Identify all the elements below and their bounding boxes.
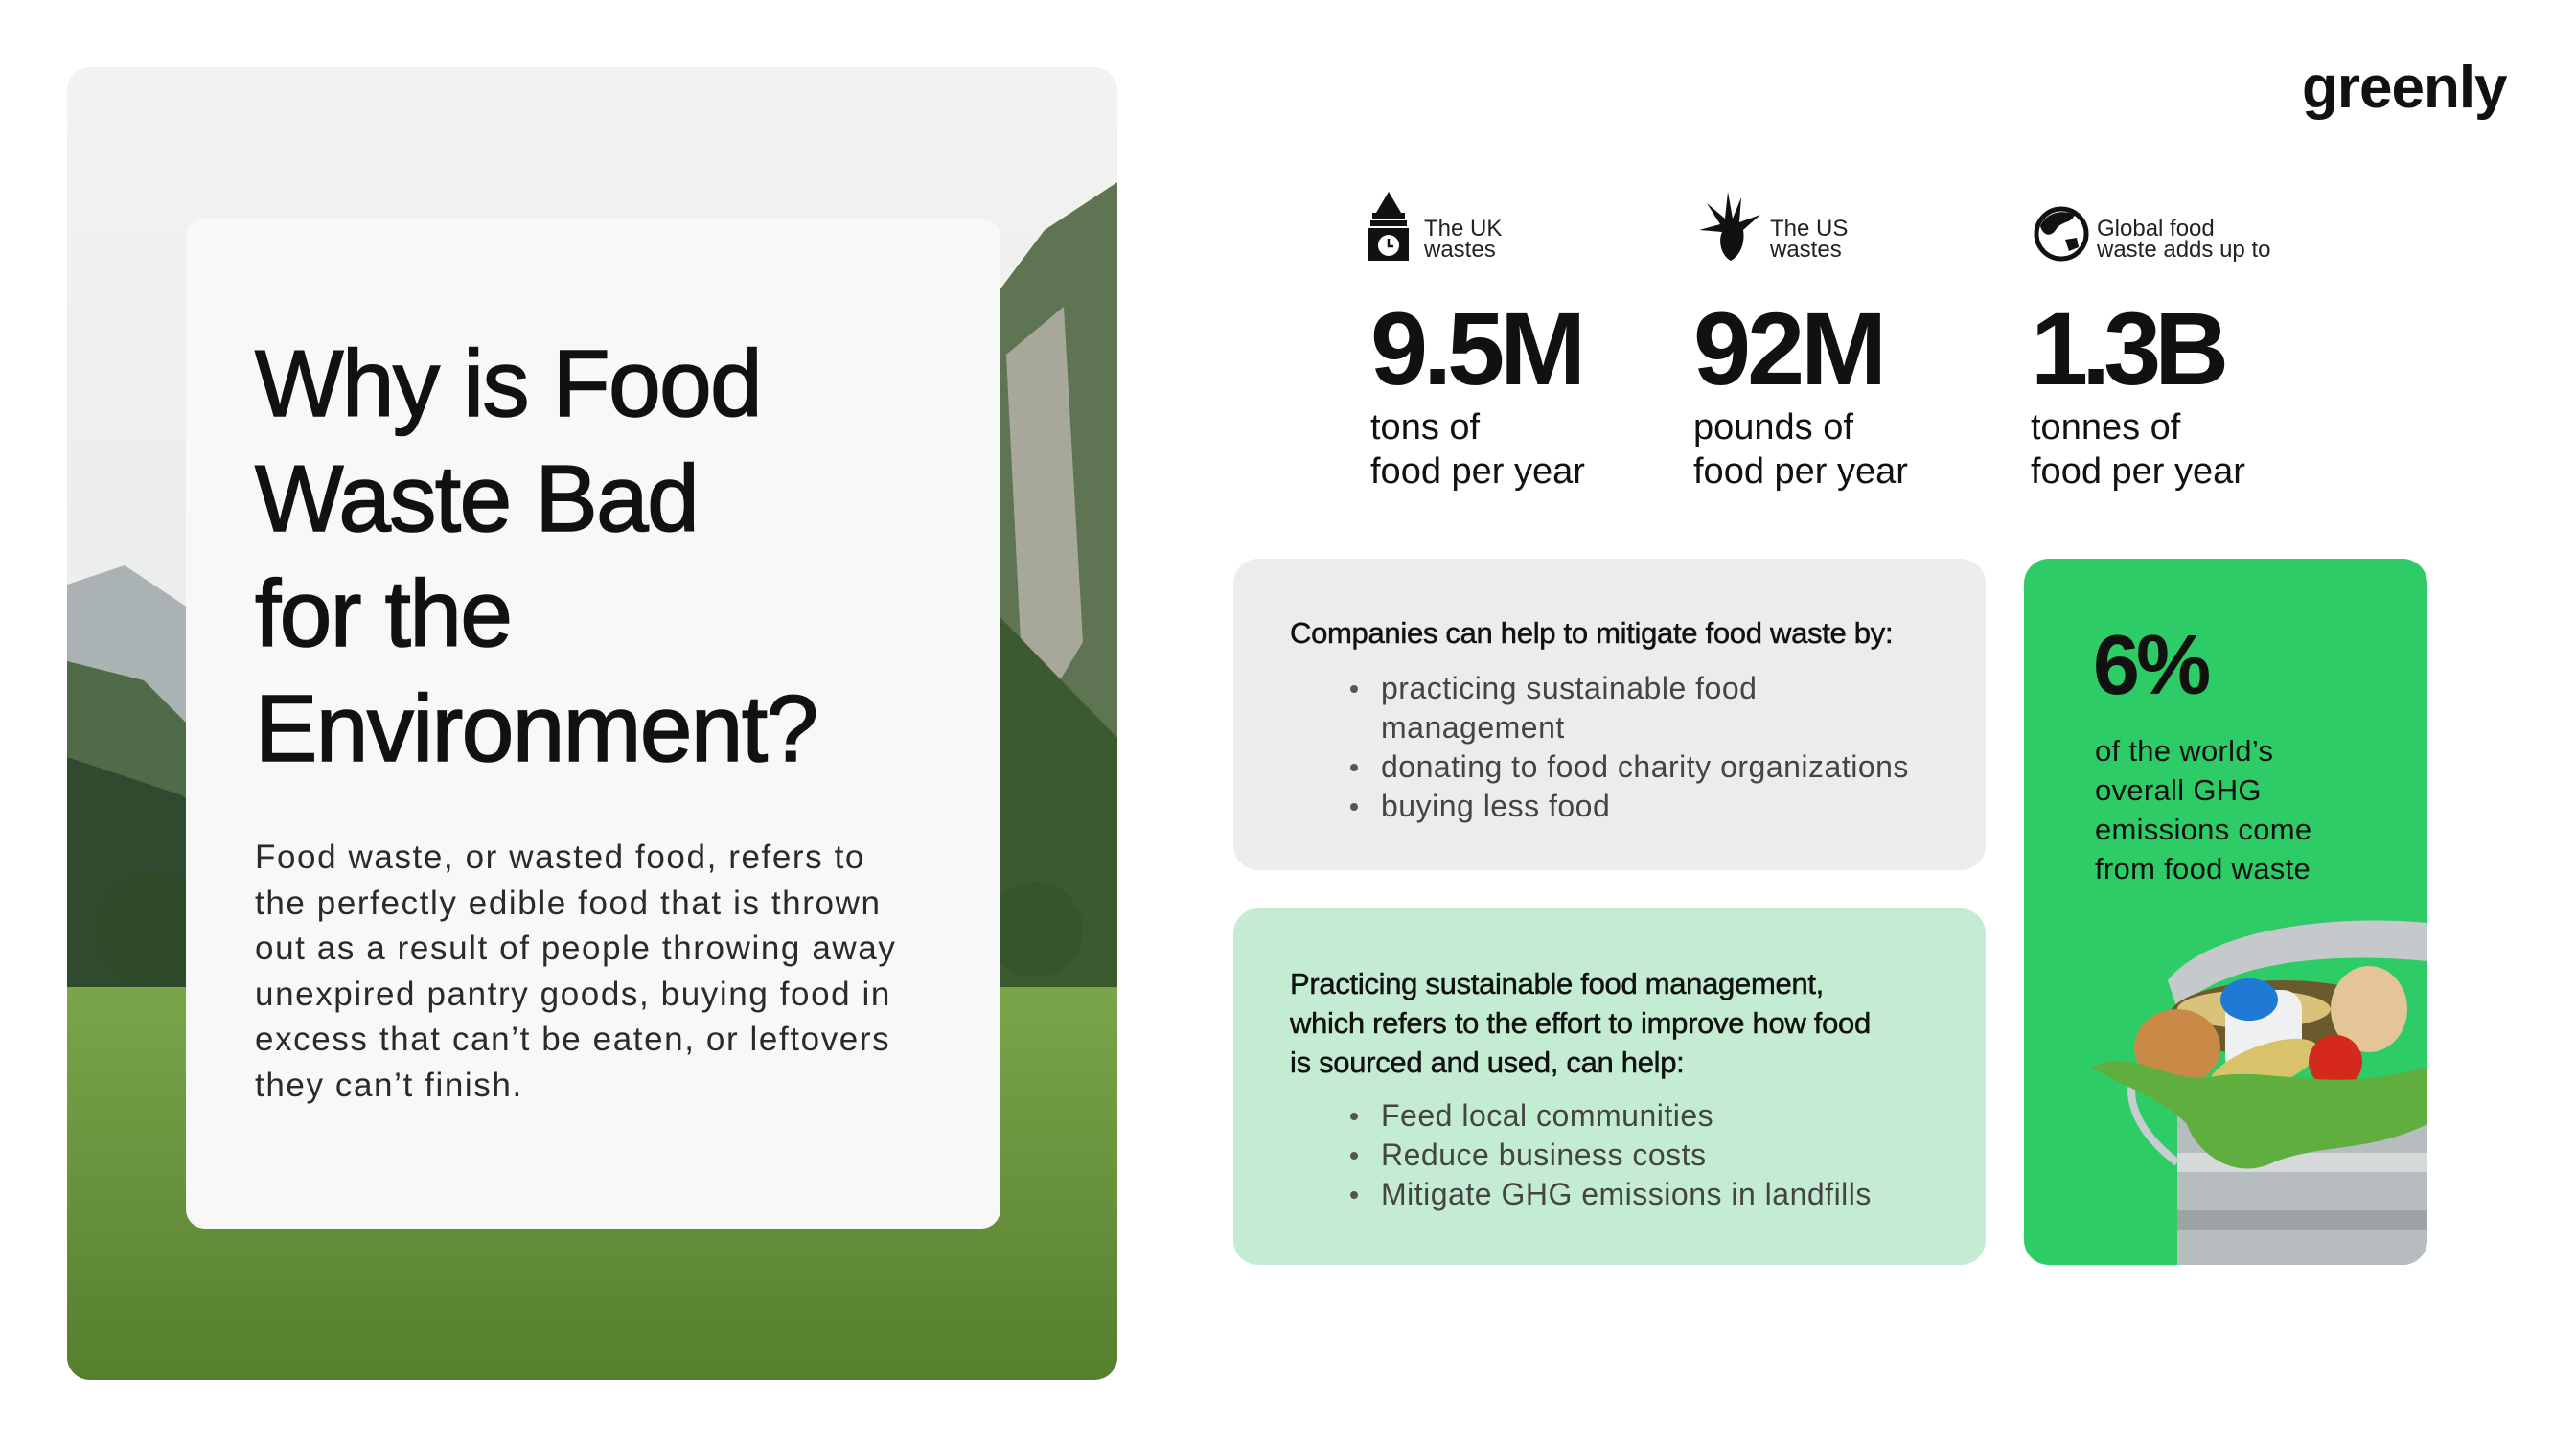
heading: Practicing sustainable food management, [1290,967,1824,1000]
bullet list [1350,1098,1872,1211]
stat: global [2031,207,2270,492]
heading: which refers to the effort to improve how food [1290,1006,1871,1040]
stat: global: Global food [2097,216,2215,242]
heading: is sourced and used, can help: [1290,1046,1685,1079]
stat: global: 1.3B [2031,290,2222,406]
photo panel: alpine meadow background [67,67,1117,1380]
stat: global: waste adds up to [2097,237,2270,263]
stat: US: pounds of [1693,407,1853,448]
description: overall GHG [2095,773,2262,807]
panel: companies can help [1233,559,1986,870]
heading [1290,967,1871,1079]
stat: global: food per year [2031,451,2245,492]
bullet list: Reduce business costs [1381,1138,1707,1172]
bullet list: donating to food charity organizations [1381,749,1909,784]
panel: sustainable food management [1233,908,1986,1265]
title: Waste Bad [255,446,698,551]
title: Why is Food [255,331,761,436]
stat: US: The US [1770,216,1848,242]
logo: greenly [2302,55,2507,121]
body text: excess that can’t be eaten, or leftovers [255,1021,890,1058]
body text: unexpired pantry goods, buying food in [255,976,891,1013]
stat: US: 92M [1693,290,1883,406]
bullet list: buying less food [1381,789,1610,823]
body text: they can’t finish. [255,1067,523,1104]
bullet list: practicing sustainable food [1381,671,1757,705]
stat: UK: 9.5M [1370,290,1581,406]
bullet list: Feed local communities [1381,1098,1714,1133]
stat: UK: The UK [1424,216,1502,242]
stat: US: wastes [1770,237,1842,263]
body text: the perfectly edible food that is thrown [255,885,882,922]
panel: 6% stat [2024,559,2427,1265]
body text: out as a result of people throwing away [255,930,896,967]
stat: global: tonnes of [2031,407,2180,448]
title: for the [255,561,511,666]
bullet list: management [1381,710,1565,745]
icon: globe [2034,207,2089,261]
description [2095,734,2312,886]
icon: statue of liberty crown [1699,192,1760,261]
description: emissions come [2095,813,2312,846]
bullet list: Mitigate GHG emissions in landfills [1381,1177,1872,1211]
stat: UK: tons of [1370,407,1480,448]
heading: Companies can help to mitigate food waste by: [1290,616,1893,650]
description: from food waste [2095,852,2311,886]
body text [255,839,896,1104]
title: Environment? [255,676,817,781]
description: of the world’s [2095,734,2273,768]
text card [186,218,1000,1229]
body text: Food waste, or wasted food, refers to [255,839,865,876]
stat: US: food per year [1693,451,1908,492]
image: trash can with food [2091,920,2427,1265]
icon: big ben [1368,192,1409,261]
stat: UK [1368,192,1585,492]
bullet list [1350,671,1909,823]
stat: UK: food per year [1370,451,1585,492]
stat: UK: wastes [1424,237,1496,263]
stat: US [1693,192,1908,492]
title [254,331,817,781]
big number: 6% [2093,617,2207,712]
